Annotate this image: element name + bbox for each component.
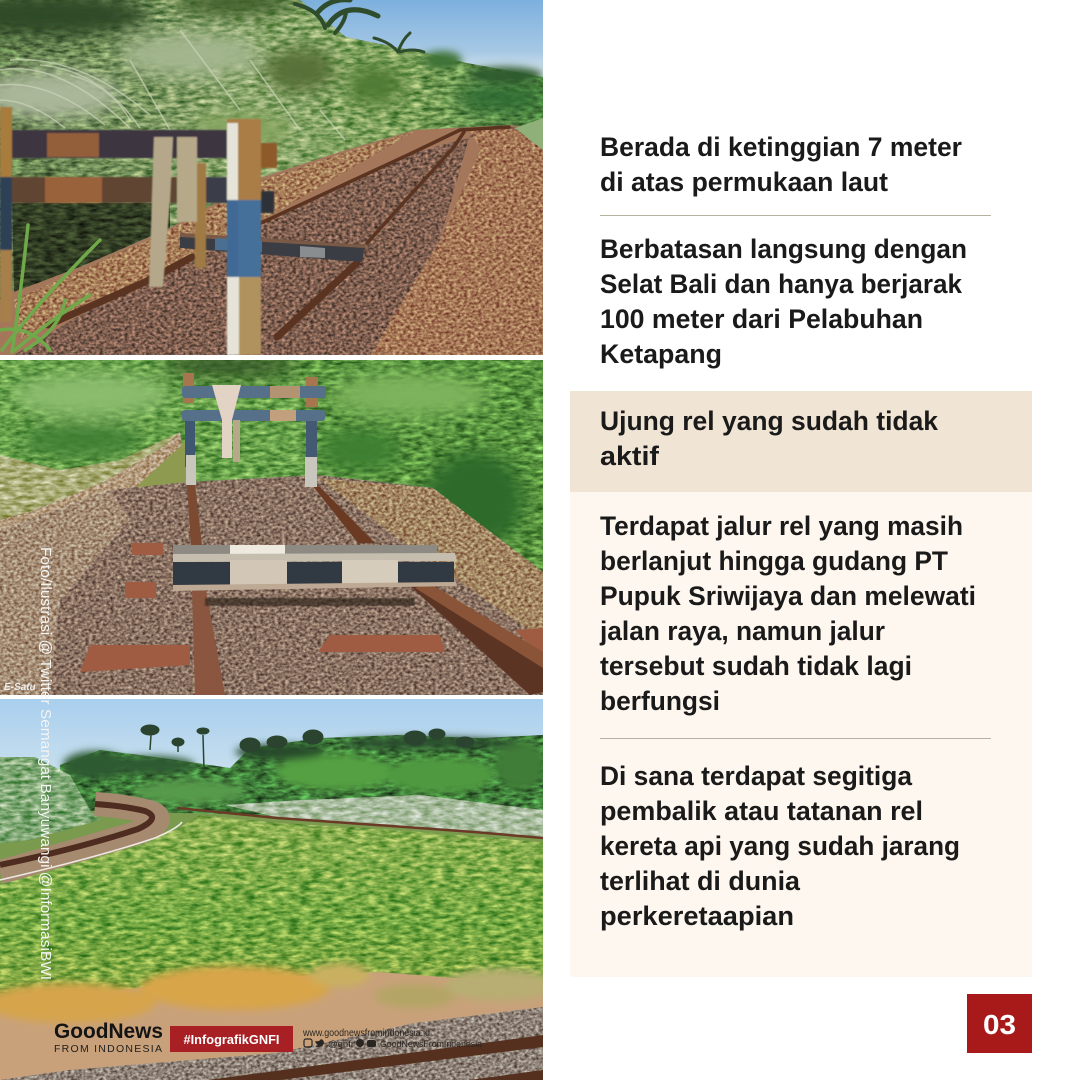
photo: curving railway through green field xyxy=(0,699,555,1080)
text block: altitude: Berada di ketinggian 7 meter xyxy=(600,132,962,162)
footer website and social handles: www.goodnewsfromindonesia.id xyxy=(302,1028,430,1039)
dirt path and dry grass xyxy=(0,432,180,520)
page number badge: 03 xyxy=(983,1009,1016,1040)
text block: rail line to warehouse: berlanjut hingga gudang PT xyxy=(600,546,948,576)
curved rail line left xyxy=(0,804,182,880)
text: photo watermark: E-Satu xyxy=(4,682,36,693)
barrier posts and bars xyxy=(0,107,277,355)
text block: reversing triangle xyxy=(600,761,960,931)
rail beam buffer xyxy=(180,233,365,262)
beam shadow xyxy=(205,598,415,606)
text: vertical photo credit: Foto/Ilustrasi @ Twitter Semangat Banyuwangi @InformasiBWI xyxy=(37,547,53,980)
gravel and bottom rail xyxy=(0,1007,543,1080)
foreground pale grass blades xyxy=(0,30,345,140)
rail beam buffer xyxy=(173,545,457,591)
text block: altitude: di atas permukaan laut xyxy=(600,167,888,197)
grass plant xyxy=(0,225,100,352)
text block: location: Ketapang xyxy=(600,339,722,369)
ballast ground xyxy=(0,475,543,695)
barrier xyxy=(182,373,326,487)
text block: reversing triangle: pembalik atau tatanan rel xyxy=(600,796,923,826)
page number badge xyxy=(967,994,1032,1053)
icon: palm trees xyxy=(295,0,424,52)
footer website and social handles: @gnfi xyxy=(328,1039,353,1050)
text block: reversing triangle: terlihat di dunia xyxy=(600,866,801,896)
pale bush band xyxy=(225,795,543,838)
tie plates xyxy=(80,543,543,672)
logo: GoodNews from Indonesia: GoodNews xyxy=(54,1020,163,1043)
tree line xyxy=(60,735,543,816)
text block: location xyxy=(600,234,967,369)
photo: railway end buffer seen from the front xyxy=(0,356,543,695)
text block: reversing triangle: Di sana terdapat segitiga xyxy=(600,761,913,791)
hashtag badge xyxy=(170,1026,293,1052)
footer website and social handles xyxy=(302,1028,483,1050)
text block: rail line to warehouse: jalan raya, namun jalur xyxy=(599,616,885,646)
logo: GoodNews from Indonesia xyxy=(54,1020,163,1055)
text block: rail line to warehouse: berfungsi xyxy=(600,686,720,716)
icon: palms xyxy=(141,725,474,770)
hashtag badge: #InfografikGNFI xyxy=(184,1033,280,1047)
logo: GoodNews from Indonesia: FROM INDONESIA xyxy=(54,1043,162,1055)
rail bed gravel xyxy=(14,127,543,355)
heading: inactive rail end xyxy=(600,406,939,471)
panel: cream body xyxy=(570,492,1032,977)
rails xyxy=(48,127,509,337)
footer website and social handles: GoodNewsFromIndonesia xyxy=(380,1039,483,1050)
text block: location: Selat Bali dan hanya berjarak xyxy=(600,269,963,299)
text block: altitude xyxy=(600,132,962,197)
photo: railway end buffer seen from the side xyxy=(0,0,545,355)
text block: reversing triangle: perkeretaapian xyxy=(600,901,794,931)
heading: inactive rail end: Ujung rel yang sudah tidak xyxy=(600,406,939,436)
text block: location: 100 meter dari Pelabuhan xyxy=(600,304,923,334)
lower ground xyxy=(0,972,543,1080)
dry grass xyxy=(0,963,555,1023)
text block: location: Berbatasan langsung dengan xyxy=(600,234,967,264)
text block: rail line to warehouse: Pupuk Sriwijaya dan melewati xyxy=(600,581,976,611)
text block: rail line to warehouse: tersebut sudah tidak lagi xyxy=(600,651,912,681)
heading: inactive rail end: aktif xyxy=(600,441,660,471)
right rail line xyxy=(177,808,543,838)
panel: highlighted heading xyxy=(570,391,1032,492)
text block: reversing triangle: kereta api yang sudah jarang xyxy=(600,831,960,861)
green field xyxy=(0,815,543,1012)
text block: rail line to warehouse: Terdapat jalur rel yang masih xyxy=(600,511,963,541)
dark vegetation under barrier xyxy=(12,203,170,292)
rails xyxy=(187,485,543,695)
text block: rail line to warehouse xyxy=(599,511,976,716)
